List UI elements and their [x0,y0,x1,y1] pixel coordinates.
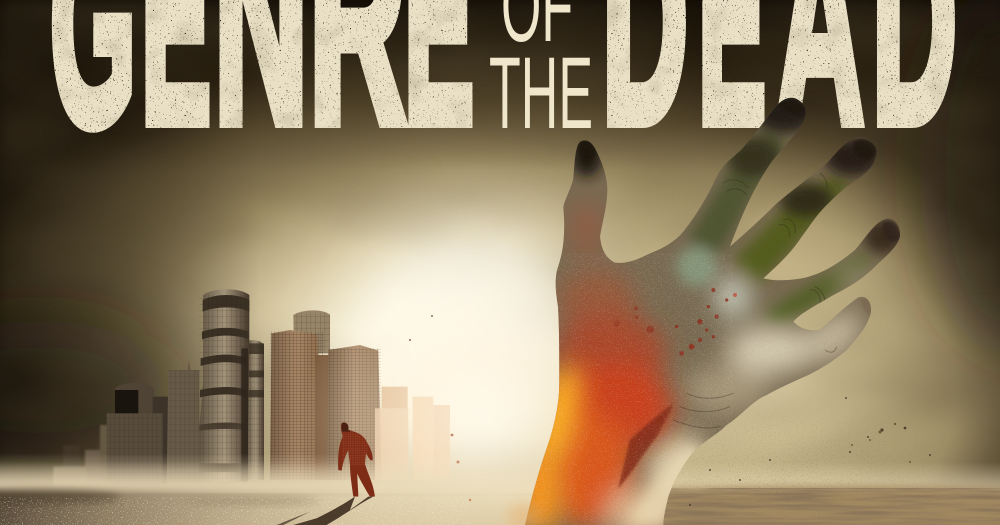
skin base [525,98,894,525]
green tone on fingers [677,130,873,327]
shadow [277,497,373,525]
knuckle creases and nails [673,173,837,428]
secondary round tower [247,340,264,480]
city skyline [0,247,707,525]
scattered dark flecks [689,397,931,506]
dark fingertips [570,87,903,255]
title: Genre of the Dead [50,0,957,184]
dust at hand base [507,503,540,525]
main round tower [199,289,249,482]
right round top [293,310,330,353]
hand [504,98,900,525]
far left buildings [53,425,113,488]
heavy title words [50,0,957,184]
zombie figure and shadow [277,420,377,525]
thin word: the: THE [489,36,593,150]
blood spatter [614,288,737,356]
airborne dust specks [409,315,911,501]
figure [338,422,375,497]
dark sand streak at right [640,486,1000,525]
ground [0,401,1000,525]
dust dissolving the wrist [627,447,703,525]
dark block and mid-rise towers [107,360,199,487]
speckle on skin [533,253,733,525]
right apartment towers [270,330,382,480]
pale thumb highlight, little finger and wrist [568,200,873,513]
brightly hazed distant towers [375,387,450,480]
drifting sand grain at right [666,401,982,525]
warm red and orange glow on the palm [547,270,673,525]
wound [618,403,673,488]
